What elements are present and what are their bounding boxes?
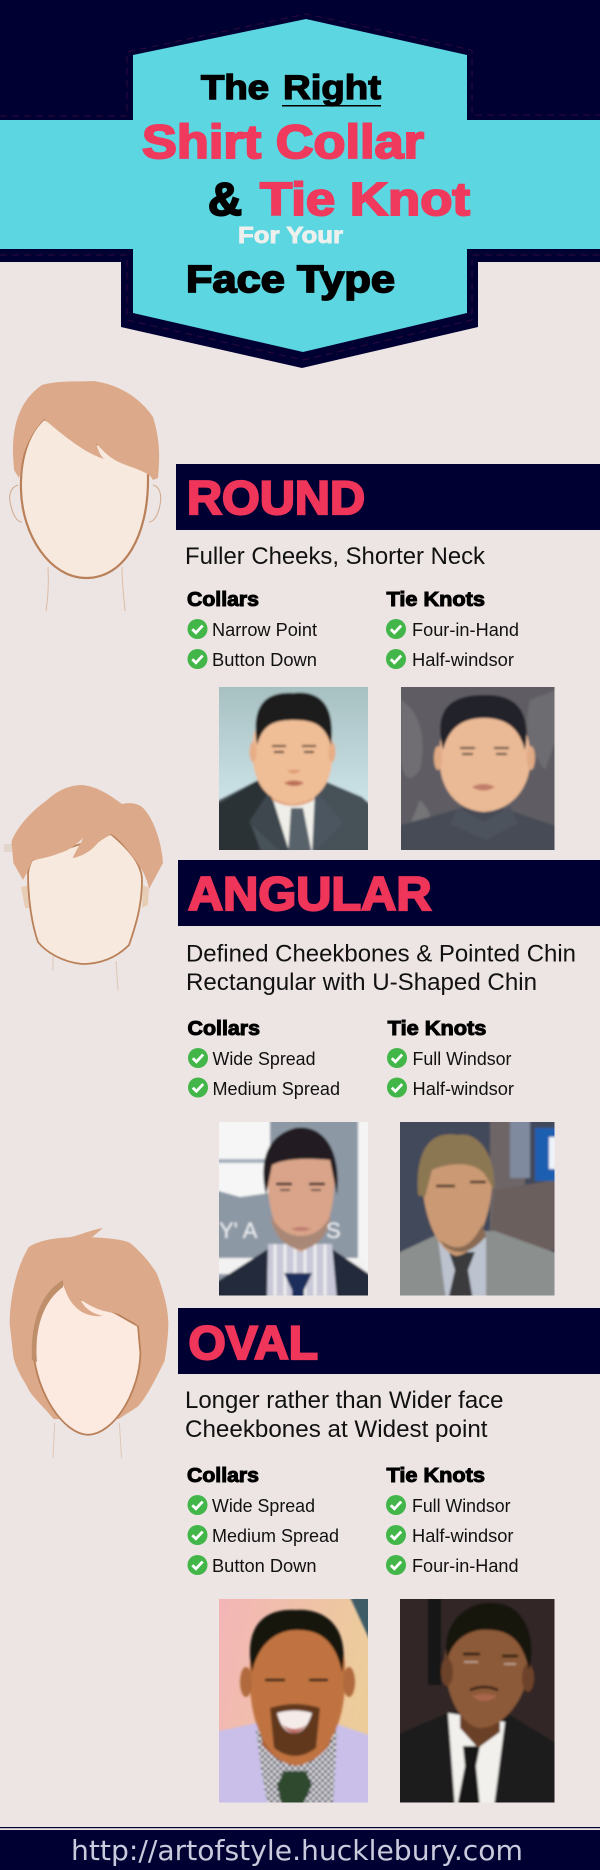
column: collars: Medium Spread — [212, 1526, 339, 1546]
column: tie knots — [386, 1465, 518, 1576]
title: and Tie Knot — [208, 173, 470, 225]
column: collars: Collars — [188, 1018, 260, 1040]
column: tie knots: Half-windsor — [412, 650, 514, 670]
photo: angular face in grey suit — [396, 1118, 559, 1300]
title: Face Type: Face Type — [186, 259, 395, 301]
description: oval: Cheekbones at Widest point — [185, 1416, 488, 1443]
description: angular: Defined Cheekbones & Pointed Chin — [186, 940, 576, 968]
column: collars: Narrow Point — [212, 620, 317, 640]
photo: oval face in black suit — [396, 1595, 559, 1807]
column: tie knots: Four-in-Hand — [412, 620, 519, 640]
heading bar: ROUND — [176, 464, 600, 530]
footer URL: http://artofstyle.hucklebury.com — [71, 1834, 523, 1867]
section: round — [176, 464, 600, 854]
title: Shirt Collar: Shirt Collar — [142, 115, 424, 168]
illustration: round face — [10, 381, 161, 611]
column: collars: Wide Spread — [212, 1496, 315, 1516]
photo: round face in tunic — [397, 683, 559, 854]
description: round: Fuller Cheeks, Shorter Neck — [185, 543, 486, 570]
column: tie knots — [387, 1018, 514, 1099]
column: collars: Collars — [187, 589, 259, 611]
illustration: angular face — [4, 785, 163, 990]
photo: angular face in striped shirt — [215, 1118, 372, 1300]
title: For Your: For Your — [238, 222, 343, 248]
title: and Tie Knot: Tie Knot — [260, 173, 470, 225]
photo: oval face smiling — [215, 1595, 372, 1807]
column: tie knots: Half-windsor — [412, 1526, 514, 1546]
column: tie knots: Tie Knots — [386, 589, 485, 611]
column: collars — [187, 1465, 339, 1576]
heading bar: OVAL — [178, 1308, 600, 1374]
description: oval — [185, 1387, 504, 1443]
column: collars — [187, 589, 317, 670]
footer bar — [0, 1827, 600, 1870]
column: collars: Button Down — [212, 650, 317, 670]
description: angular: Rectangular with U-Shaped Chin — [186, 969, 537, 996]
photo: angular face in striped shirt: S — [326, 1218, 341, 1243]
section: angular — [178, 860, 600, 1300]
column: tie knots: Four-in-Hand — [412, 1556, 518, 1576]
column: collars: Button Down — [212, 1556, 316, 1576]
section: oval — [178, 1308, 600, 1807]
column: collars: Collars — [187, 1465, 259, 1487]
heading bar: ANGULAR: ANGULAR — [188, 867, 432, 920]
column: tie knots: Full Windsor — [412, 1049, 512, 1069]
title: and Tie Knot: & — [208, 173, 242, 225]
column: collars: Medium Spread — [212, 1079, 340, 1099]
column: tie knots: Tie Knots — [386, 1465, 485, 1487]
column: tie knots: Half-windsor — [412, 1079, 514, 1099]
column: tie knots — [386, 589, 519, 670]
title: The Right — [201, 69, 381, 107]
title: The Right: Right — [283, 69, 381, 107]
header banner — [0, 0, 600, 368]
heading bar: ROUND: ROUND — [187, 471, 365, 524]
heading bar: ANGULAR — [178, 860, 600, 926]
photo: angular face in striped shirt: Y' A — [219, 1218, 258, 1243]
description: oval: Longer rather than Wider face — [185, 1387, 504, 1414]
column: collars — [188, 1018, 340, 1099]
heading bar: OVAL: OVAL — [188, 1316, 318, 1369]
title: The Right: The — [201, 69, 269, 107]
photo: round face in suit — [215, 683, 372, 854]
description: angular — [186, 940, 576, 996]
column: tie knots: Full Windsor — [412, 1496, 510, 1516]
column: collars: Wide Spread — [212, 1049, 316, 1069]
illustration: oval face — [10, 1228, 168, 1458]
column: tie knots: Tie Knots — [388, 1018, 486, 1040]
